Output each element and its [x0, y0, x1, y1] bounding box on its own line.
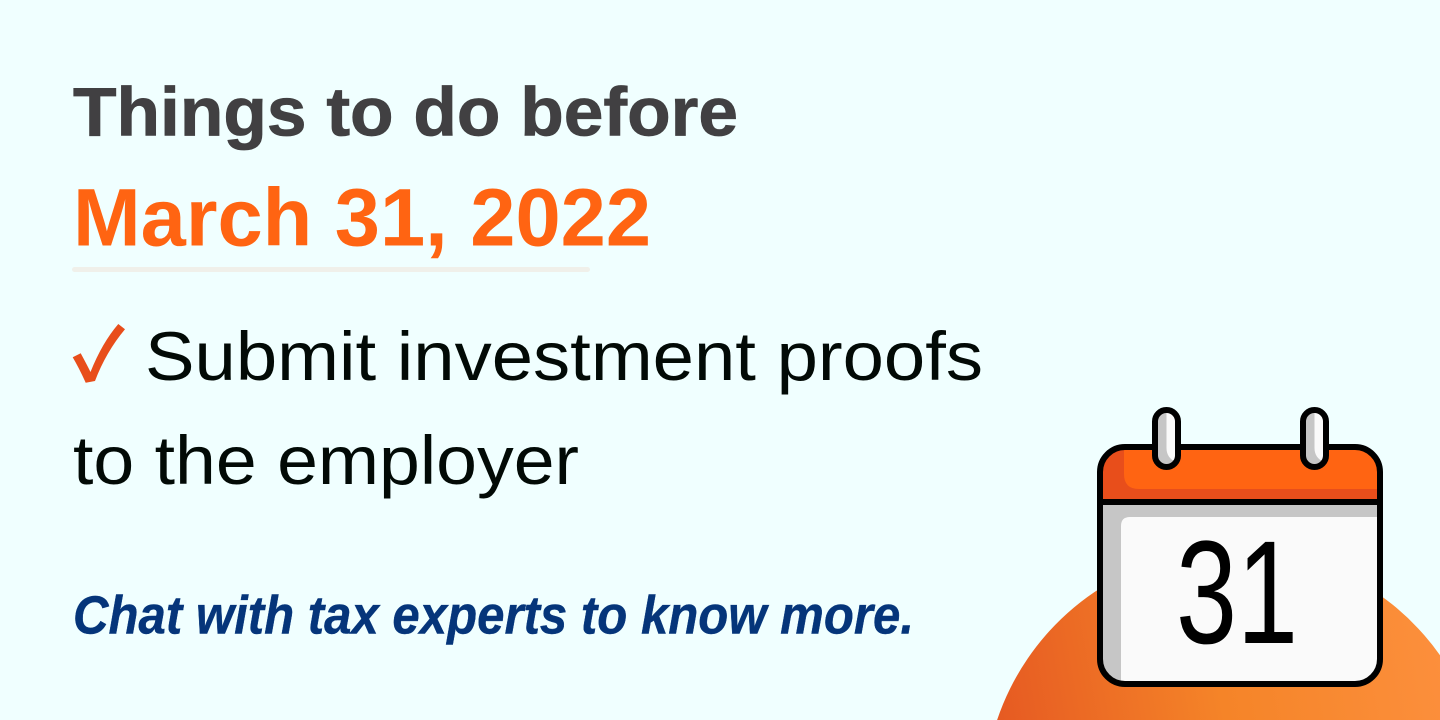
date heading: March 31, 2022	[73, 172, 651, 264]
task text line 2: to the employer	[73, 422, 579, 499]
calendar header divider	[1100, 499, 1380, 505]
icon: check mark	[73, 324, 125, 383]
title: Things to do before	[73, 74, 738, 150]
decorative orange circle	[997, 549, 1440, 720]
task text line 1: Submit investment proofs	[145, 318, 983, 395]
icon: calendar	[1100, 410, 1380, 684]
calendar header highlight	[1124, 449, 1378, 489]
calendar outline	[1100, 447, 1380, 684]
calendar date number: 31	[1176, 511, 1298, 675]
calendar right ring	[1303, 410, 1326, 467]
calendar header	[1100, 447, 1380, 502]
call to action: Chat with tax experts to know more.	[73, 586, 914, 646]
calendar page white sheet	[1121, 517, 1378, 682]
calendar page base	[1100, 502, 1380, 684]
calendar left ring	[1155, 410, 1178, 467]
heading underline	[72, 267, 590, 272]
